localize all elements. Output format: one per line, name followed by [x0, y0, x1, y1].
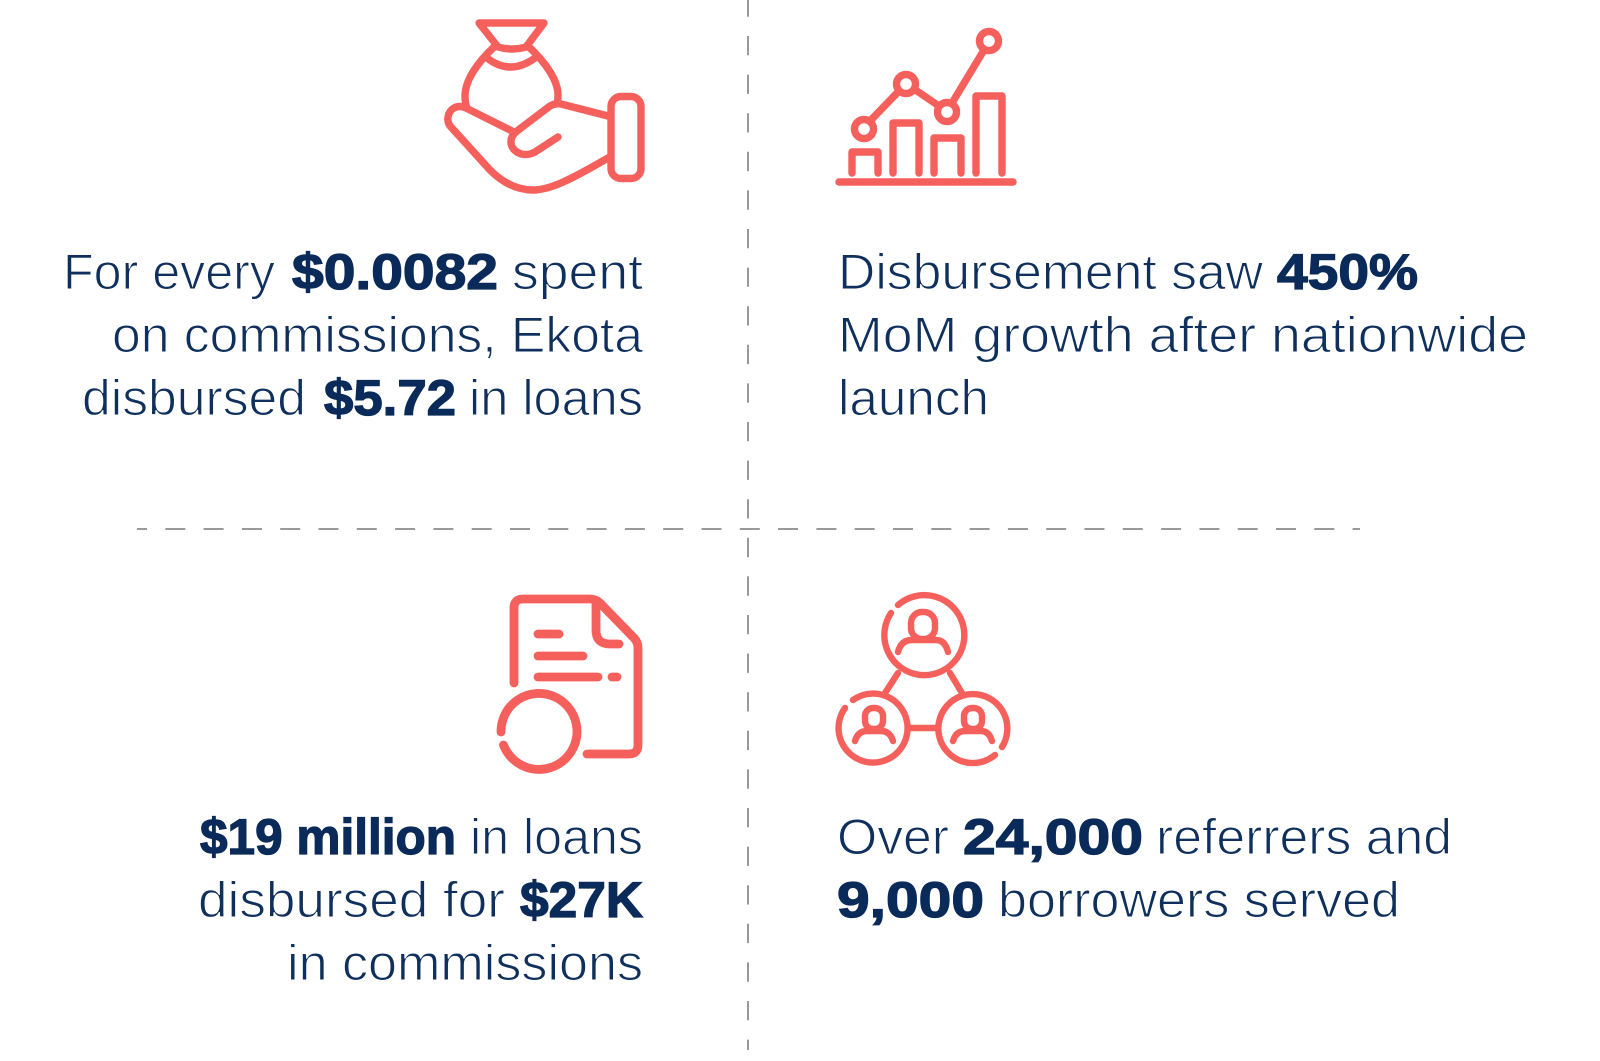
text: commission efficiency: spent	[512, 243, 643, 300]
text: referrers and borrowers: borrowers served	[998, 871, 1400, 928]
text: commission efficiency: disbursed	[82, 369, 306, 426]
text: referrers and borrowers: 9,000	[837, 871, 984, 928]
text: loans disbursed: in commissions	[287, 934, 643, 991]
text: commission efficiency: $5.72	[324, 369, 456, 426]
text: loans disbursed: $19 million	[200, 808, 456, 865]
text: commission efficiency: in loans	[469, 369, 643, 426]
text: disbursement growth: Disbursement saw	[838, 243, 1264, 300]
text: disbursement growth	[838, 243, 1528, 426]
text: loans disbursed: in loans	[470, 808, 643, 865]
text: disbursement growth: launch	[838, 369, 989, 426]
text: disbursement growth: 450%	[1277, 243, 1418, 300]
text: loans disbursed: disbursed for	[198, 871, 505, 928]
text: referrers and borrowers: referrers and	[1156, 808, 1452, 865]
text: loans disbursed	[198, 808, 643, 991]
text: referrers and borrowers: 24,000	[963, 808, 1143, 865]
text: loans disbursed: $27K	[520, 871, 643, 928]
text: commission efficiency: For every	[63, 243, 276, 300]
text: commission efficiency: $0.0082	[292, 243, 498, 300]
text: commission efficiency: on commissions, Ekota	[112, 306, 644, 363]
icon: hand holding money bag	[448, 23, 641, 190]
text: referrers and borrowers	[837, 808, 1452, 928]
icon: connected people network	[839, 595, 1007, 763]
icon: bar chart with growth line	[839, 32, 1013, 182]
text: commission efficiency	[63, 243, 644, 426]
text: referrers and borrowers: Over	[837, 808, 949, 865]
icon: document with coin	[501, 599, 638, 769]
text: disbursement growth: MoM growth after nationwide	[838, 306, 1528, 363]
